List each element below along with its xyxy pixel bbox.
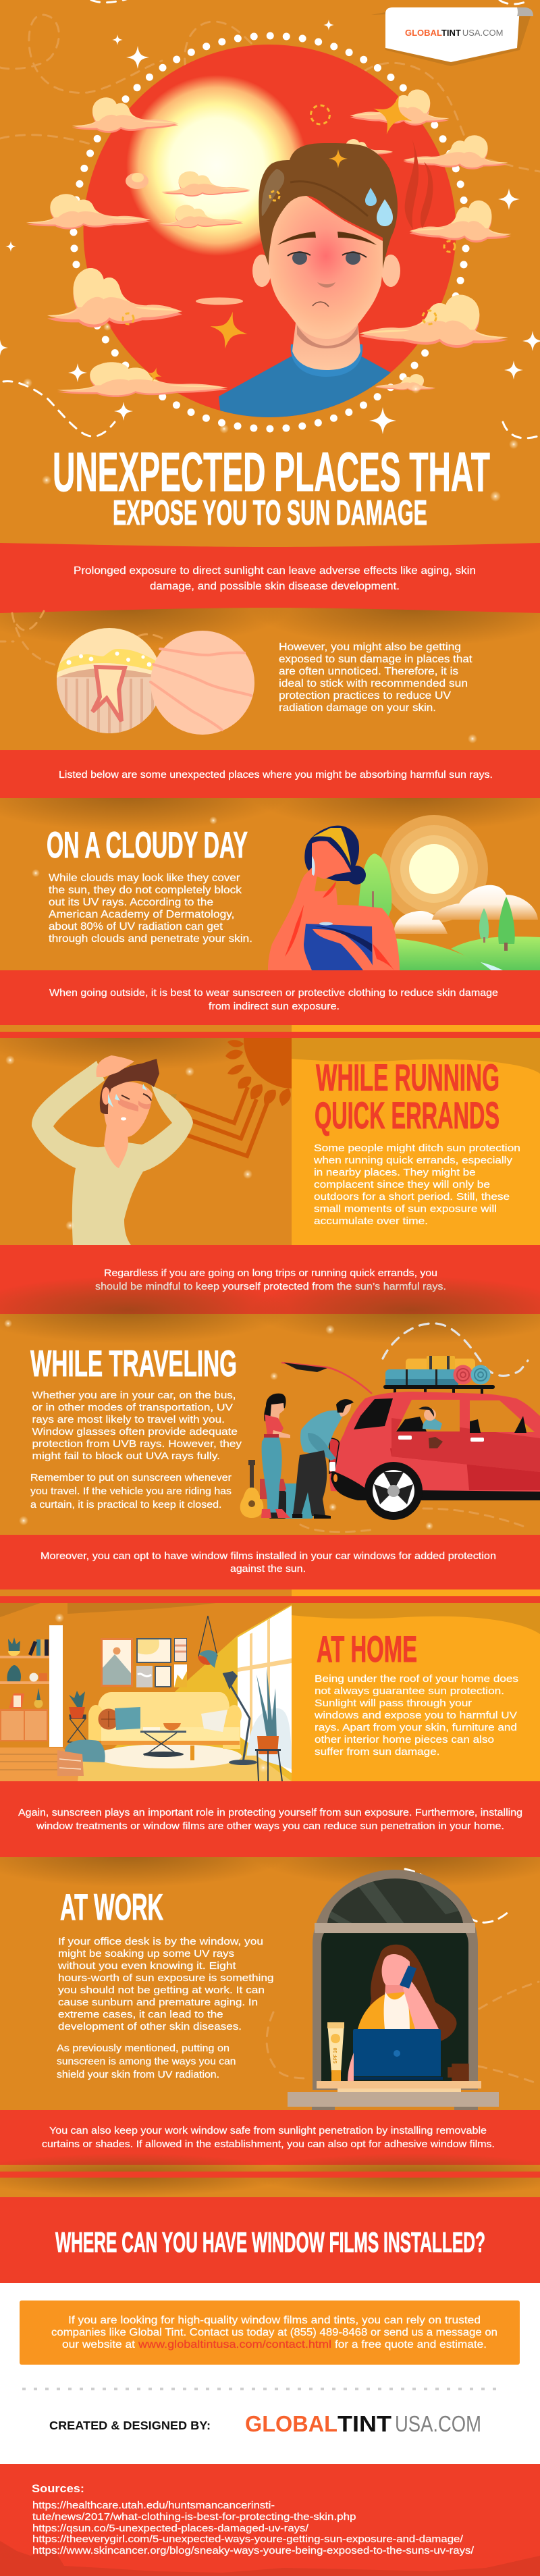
red band: work window: You can also keep your work window safe from sunlight penetration by installing removable — [49, 2126, 487, 2136]
sources list: https://theeverygirl.com/5-unexpected-ways-youre-getting-sun-exposure-and-damage/ — [32, 2533, 464, 2545]
red band: again: Again, sunscreen plays an important role in protecting yourself from sun exposure. Furthermore, installing — [18, 1808, 522, 1818]
guitar — [250, 1461, 254, 1508]
woman and man packing — [240, 1394, 354, 1519]
body text: or in other modes of transportation, UV — [32, 1402, 233, 1413]
glowing sun — [126, 75, 307, 256]
body text: might fail to block out UVA rays fully. — [32, 1450, 220, 1462]
body text: suffer from sun damage. — [315, 1746, 440, 1758]
red band: work window — [0, 2110, 540, 2165]
body text: As previously mentioned, putting on — [57, 2043, 230, 2054]
section shadows — [0, 569, 540, 831]
body — [329, 1392, 540, 1499]
sources heading: Sources: — [32, 2482, 84, 2495]
body text — [57, 1936, 274, 2080]
dotted ring — [74, 36, 466, 429]
red sun disc — [84, 45, 456, 417]
red band: regardless — [0, 1245, 540, 1314]
body text — [313, 1142, 520, 1227]
sun with rays — [179, 1038, 292, 1159]
left shelves — [0, 1637, 49, 1741]
sofa — [88, 1692, 242, 1760]
luggage — [281, 1483, 313, 1519]
panel: while traveling — [30, 1323, 540, 1532]
sources list: https://qsun.co/5-unexpected-places-damaged-uv-rays/ — [32, 2523, 309, 2534]
face — [269, 196, 383, 339]
logo ribbon — [371, 7, 533, 66]
body text: in nearby places. They might be — [314, 1167, 476, 1178]
body text: shield your skin from UV radiation. — [57, 2070, 219, 2080]
sunlight on wall — [78, 1604, 292, 1781]
red band: going outside: When going outside, it is best to wear sunscreen or protective clothing to reduce skin damage — [49, 987, 498, 999]
skin damage text: ideal to stick with recommended sun — [279, 678, 468, 689]
heading — [315, 1056, 500, 1136]
intro band: Prolonged exposure to direct sunlight can leave adverse effects like aging, skin — [74, 565, 476, 577]
strip divider — [0, 1589, 540, 1603]
body text: If your office desk is by the window, you — [58, 1936, 263, 1947]
callout: contact — [20, 2301, 520, 2365]
body text: sunscreen is among the ways you can — [57, 2057, 236, 2068]
body text: a curtain, it is practical to keep it closed. — [30, 1500, 221, 1510]
body text: complacent since they will only be — [314, 1179, 490, 1190]
callout: contact: companies like Global Tint. Contact us today at (855) 489-8468 or send us a message on — [51, 2327, 497, 2338]
panel: on a cloudy day — [47, 815, 540, 970]
dashed orange rings — [123, 105, 455, 324]
body text: through clouds and penetrate your skin. — [49, 933, 252, 945]
body text: windows and expose you to harmful UV — [314, 1710, 517, 1721]
sources list: https://www.skincancer.org/blog/sneaky-ways-youre-being-exposed-to-the-suns-uv-rays/ — [32, 2545, 475, 2556]
woman on phone — [358, 1945, 457, 2043]
credit: CREATED & DESIGNED BY: — [49, 2419, 211, 2432]
heading: WHILE TRAVELING — [30, 1343, 237, 1384]
roof luggage — [406, 1359, 475, 1372]
heading: ON A CLOUDY DAY — [47, 824, 248, 866]
section shadows — [0, 1276, 540, 1887]
callout: contact: www.globaltintusa.com/contact.html — [138, 2339, 331, 2350]
body text: cause sunburn and premature aging. In — [58, 1997, 258, 2008]
wheel — [364, 1462, 423, 1520]
red band: moreover — [0, 1535, 540, 1589]
body text: rays are most likely to travel with you. — [32, 1414, 225, 1425]
heat waves — [405, 138, 433, 230]
woman — [264, 1394, 286, 1421]
strip divider — [0, 1025, 540, 1038]
body text: rays. Apart from your skin, furniture and — [315, 1722, 517, 1733]
red band: going outside: from indirect sun exposure. — [209, 1001, 340, 1012]
boy — [219, 143, 400, 417]
sun with halo — [380, 815, 488, 923]
skin damage panel — [0, 611, 254, 736]
body text: might be soaking up some UV rays — [58, 1948, 234, 1960]
pouf and pillow — [57, 1739, 105, 1776]
body text: Some people might ditch sun protection — [314, 1142, 520, 1154]
red band: again — [0, 1781, 540, 1857]
window — [238, 1606, 292, 1773]
arrowheads — [159, 1094, 191, 1140]
orange stars — [146, 89, 418, 384]
intro band: damage, and possible skin disease development. — [150, 581, 400, 592]
body text: the sun, they do not completely block — [49, 885, 242, 896]
red band: moreover: against the sun. — [230, 1563, 306, 1575]
icon: skin cross-section — [57, 628, 254, 736]
picture frames — [101, 1638, 187, 1687]
sources list — [32, 2500, 475, 2556]
sweat drops — [365, 188, 377, 206]
body text: Being under the roof of your home does — [315, 1673, 518, 1685]
logo: GLOBAL — [245, 2412, 338, 2437]
eyes and brows — [292, 251, 307, 265]
skin damage text: are often unnoticed. Therefore, it is — [279, 666, 458, 677]
laptop — [351, 2029, 443, 2080]
logo text: GLOBALTINTUSA.COM — [405, 28, 503, 38]
hero panel — [0, 0, 540, 502]
child in window — [423, 1418, 442, 1430]
callout: contact: our website at — [62, 2339, 136, 2350]
red band: work window: curtains or shades. If allowed in the establishment, you can also opt for adhesive window films. — [42, 2139, 495, 2150]
body text: development of other skin diseases. — [58, 2021, 242, 2032]
skin damage text: exposed to sun damage in places that — [279, 654, 473, 665]
body text — [30, 1390, 242, 1510]
heading: AT WORK — [60, 1887, 163, 1928]
sources list: https://healthcare.utah.edu/huntsmancancerinsti- — [32, 2500, 275, 2511]
red band: listed below — [0, 750, 540, 798]
body text: outdoors for a short period. Still, these — [314, 1191, 510, 1203]
red band: again: window treatments or window films are other ways you can reduce sun penetration in your home. — [36, 1821, 504, 1832]
body text: Window glasses often provide adequate — [32, 1426, 238, 1438]
red band: going outside — [0, 970, 540, 1025]
skin damage text: However, you might also be getting — [279, 641, 461, 653]
body text: Whether you are in your car, on the bus, — [32, 1390, 236, 1401]
red band: regardless: Regardless if you are going on long trips or running quick errands, you — [104, 1268, 437, 1279]
body text: accumulate over time. — [314, 1215, 428, 1227]
car — [281, 1356, 540, 1520]
hair — [259, 143, 398, 269]
icon: wrinkled skin — [151, 631, 254, 735]
panel: at work — [57, 1869, 539, 2110]
tail light — [329, 1438, 339, 1473]
body text: without you even knowing it. Eight — [57, 1960, 236, 1972]
band: where can you have window films installed — [0, 2197, 540, 2283]
sunscreen tube: SPF 30 — [333, 2048, 338, 2064]
body text: Remember to put on sunscreen whenever — [30, 1473, 232, 1483]
neck — [292, 323, 360, 370]
callout: contact: for a free quote and estimate. — [335, 2339, 487, 2350]
rug — [96, 1744, 242, 1768]
landscape — [358, 853, 540, 970]
strip divider — [0, 2153, 540, 2197]
skin damage text: protection practices to reduce UV — [279, 690, 451, 702]
room illustration — [0, 1604, 292, 1781]
floor — [0, 1747, 81, 1781]
body text — [49, 872, 252, 945]
body text: American Academy of Dermatology, — [49, 909, 235, 920]
arch frame — [313, 1870, 478, 2090]
white footer panel — [0, 2283, 540, 2464]
open trunk lid — [281, 1363, 372, 1394]
shirt — [219, 344, 391, 417]
logo — [245, 2412, 481, 2437]
clouds — [26, 89, 511, 397]
logo: TINT — [338, 2412, 392, 2437]
body text: small moments of sun exposure will — [314, 1203, 497, 1215]
woman applying sunscreen — [268, 826, 400, 970]
panel: at home — [0, 1603, 540, 1781]
sources list: tute/news/2017/what-clothing-is-best-for-protecting-the-skin.php — [32, 2511, 356, 2523]
coffee table and books — [140, 1723, 186, 1757]
body text: when running quick errands, especially — [313, 1155, 513, 1166]
nose and mouth — [317, 282, 335, 288]
white column — [49, 1625, 63, 1747]
hanging planter — [198, 1616, 217, 1668]
ears — [252, 255, 271, 287]
body text: While clouds may look like they cover — [49, 872, 240, 884]
body text: protection from UVB rays. However, they — [32, 1438, 242, 1450]
window sill and base — [317, 2081, 481, 2088]
white sparkle stars — [0, 20, 540, 434]
roof rack — [383, 1385, 495, 1389]
red band: regardless: should be mindful to keep yourself protected from the sun’s harmful rays. — [95, 1282, 446, 1292]
side table and potted plant — [68, 1691, 88, 1742]
windows — [354, 1398, 393, 1429]
skin damage text: radiation damage on your skin. — [279, 702, 436, 714]
body text: Sunlight will pass through your — [315, 1698, 472, 1709]
intro band — [0, 543, 540, 613]
body text: other interior home pieces can also — [315, 1734, 494, 1745]
body text: you should not be getting at work. It can — [58, 1984, 265, 1996]
skin damage text — [279, 641, 473, 714]
red band: listed below: Listed below are some unexpected places where you might be absorbing harmful sun rays. — [59, 770, 493, 781]
body text: hours-worth of sun exposure is something — [58, 1972, 274, 1984]
callout: contact: If you are looking for high-quality window films and tints, you can rely on trusted — [68, 2315, 481, 2326]
floor plant — [255, 1668, 282, 1781]
body text: you travel. If the vehicle you are riding has — [30, 1486, 232, 1497]
title — [53, 442, 490, 533]
heading: AT HOME — [317, 1629, 417, 1670]
hair star and ring — [329, 149, 348, 168]
window scene — [288, 1870, 499, 2110]
mug — [448, 2064, 468, 2081]
cushions — [99, 1708, 119, 1730]
credit — [49, 2412, 481, 2437]
body text: extreme cases, it can lead to the — [58, 2009, 223, 2020]
glow spots — [23, 323, 518, 502]
logo: USA.COM — [395, 2412, 481, 2437]
body text: not always guarantee sun protection. — [315, 1685, 504, 1697]
sunscreen tube — [327, 2022, 344, 2083]
man shielding from sun — [32, 1055, 193, 1245]
sources panel — [0, 2464, 540, 2576]
body text: out its UV rays. According to the — [49, 897, 213, 908]
panel: while running quick errands — [0, 1038, 540, 1245]
red band: moreover: Moreover, you can opt to have window films installed in your car windows for added protection — [40, 1550, 496, 1562]
man — [300, 1411, 346, 1458]
floor lamp — [223, 1671, 257, 1765]
body text — [314, 1673, 518, 1758]
glow spots in lower sections — [4, 734, 477, 1772]
body text: about 80% of UV radiation can get — [49, 921, 223, 932]
arm and hand — [348, 2053, 354, 2081]
